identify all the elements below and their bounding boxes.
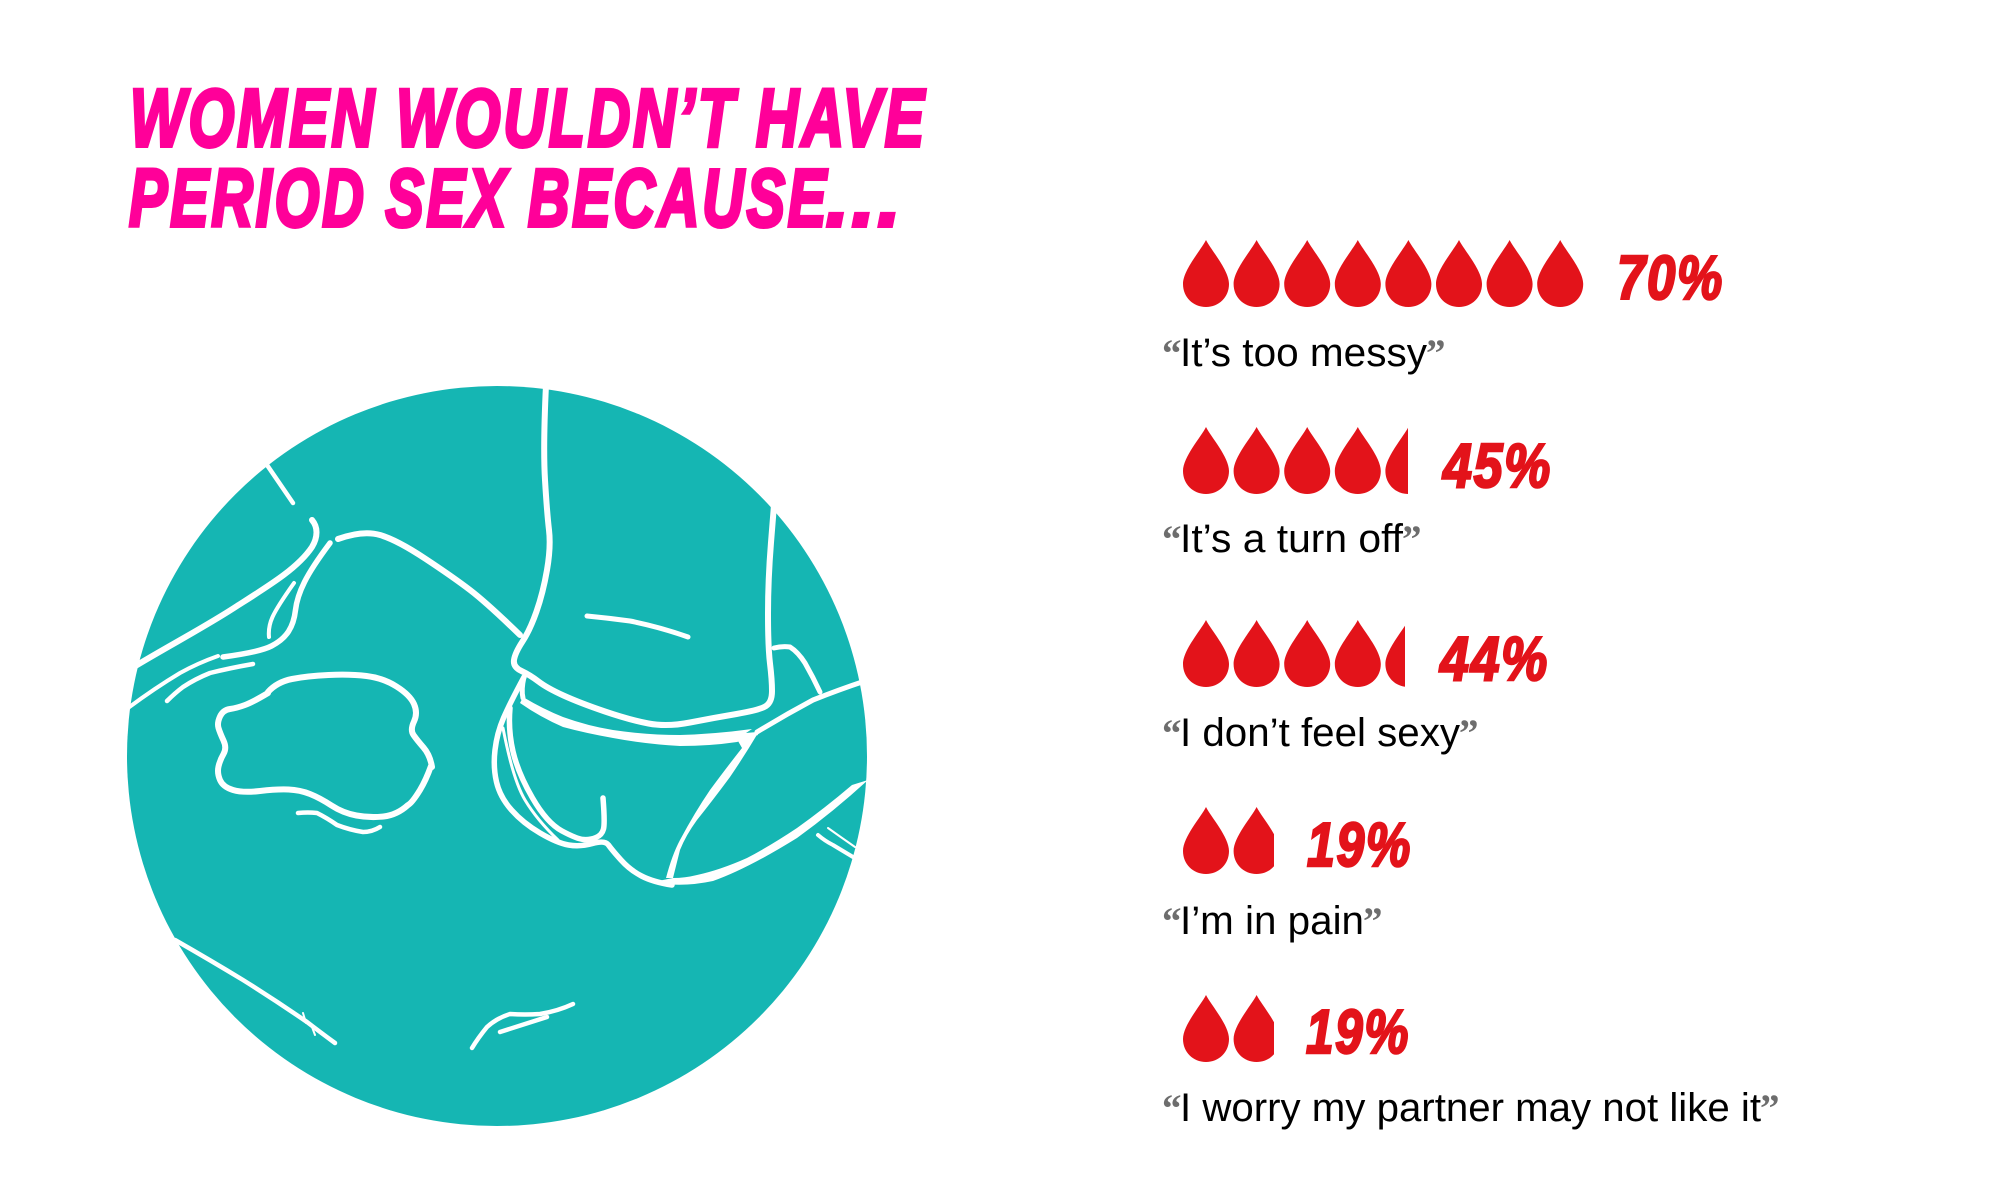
row 2: 45 percent turn off: It’s a turn off	[1180, 517, 1404, 561]
row 4: 19 percent in pain: “	[1162, 900, 1182, 943]
thong strap	[666, 733, 758, 878]
row 5: 19 percent partner may not like it: “	[1162, 1087, 1182, 1130]
row 3: 44 percent not sexy: “	[1162, 712, 1182, 755]
row 4: 19 percent in pain: 19%	[1307, 811, 1412, 880]
row 1: 70 percent too messy: 70%	[1617, 244, 1724, 313]
row 1: 70 percent too messy	[1162, 240, 1724, 375]
title: PERIOD SEX BECAUSE	[129, 153, 829, 244]
row 5: 19 percent partner may not like it: 19%	[1306, 998, 1410, 1067]
row 3: 44 percent not sexy: I don’t feel sexy	[1180, 711, 1460, 755]
row 2: 45 percent turn off: ”	[1402, 518, 1422, 561]
title: ...	[826, 153, 903, 244]
row 2: 45 percent turn off: “	[1162, 518, 1182, 561]
row 5: 19 percent partner may not like it: I worry my partner may not like it	[1180, 1086, 1761, 1130]
illustration: teal circle with white line drawing	[127, 385, 868, 1126]
row 4: 19 percent in pain	[1162, 807, 1412, 943]
row 2: 45 percent turn off: 45%	[1441, 432, 1552, 501]
title	[129, 73, 927, 244]
row 4: 19 percent in pain: I’m in pain	[1180, 899, 1364, 943]
row 2: 45 percent turn off	[1162, 427, 1552, 561]
waistband	[520, 697, 758, 746]
row 4: 19 percent in pain: ”	[1363, 900, 1382, 943]
row 1: 70 percent too messy: ”	[1426, 332, 1446, 375]
row 5: 19 percent partner may not like it: ”	[1760, 1087, 1780, 1130]
row 5: 19 percent partner may not like it	[1162, 995, 1780, 1130]
row 3: 44 percent not sexy	[1162, 620, 1549, 755]
row 3: 44 percent not sexy: 44%	[1438, 625, 1549, 694]
infographic canvas	[127, 87, 1778, 1130]
row 3: 44 percent not sexy: ”	[1459, 712, 1478, 755]
title: WOMEN WOULDN’T HAVE	[130, 73, 927, 164]
row 1: 70 percent too messy: It’s too messy	[1180, 331, 1427, 375]
thigh crease	[653, 780, 868, 885]
row 1: 70 percent too messy: “	[1162, 332, 1182, 375]
